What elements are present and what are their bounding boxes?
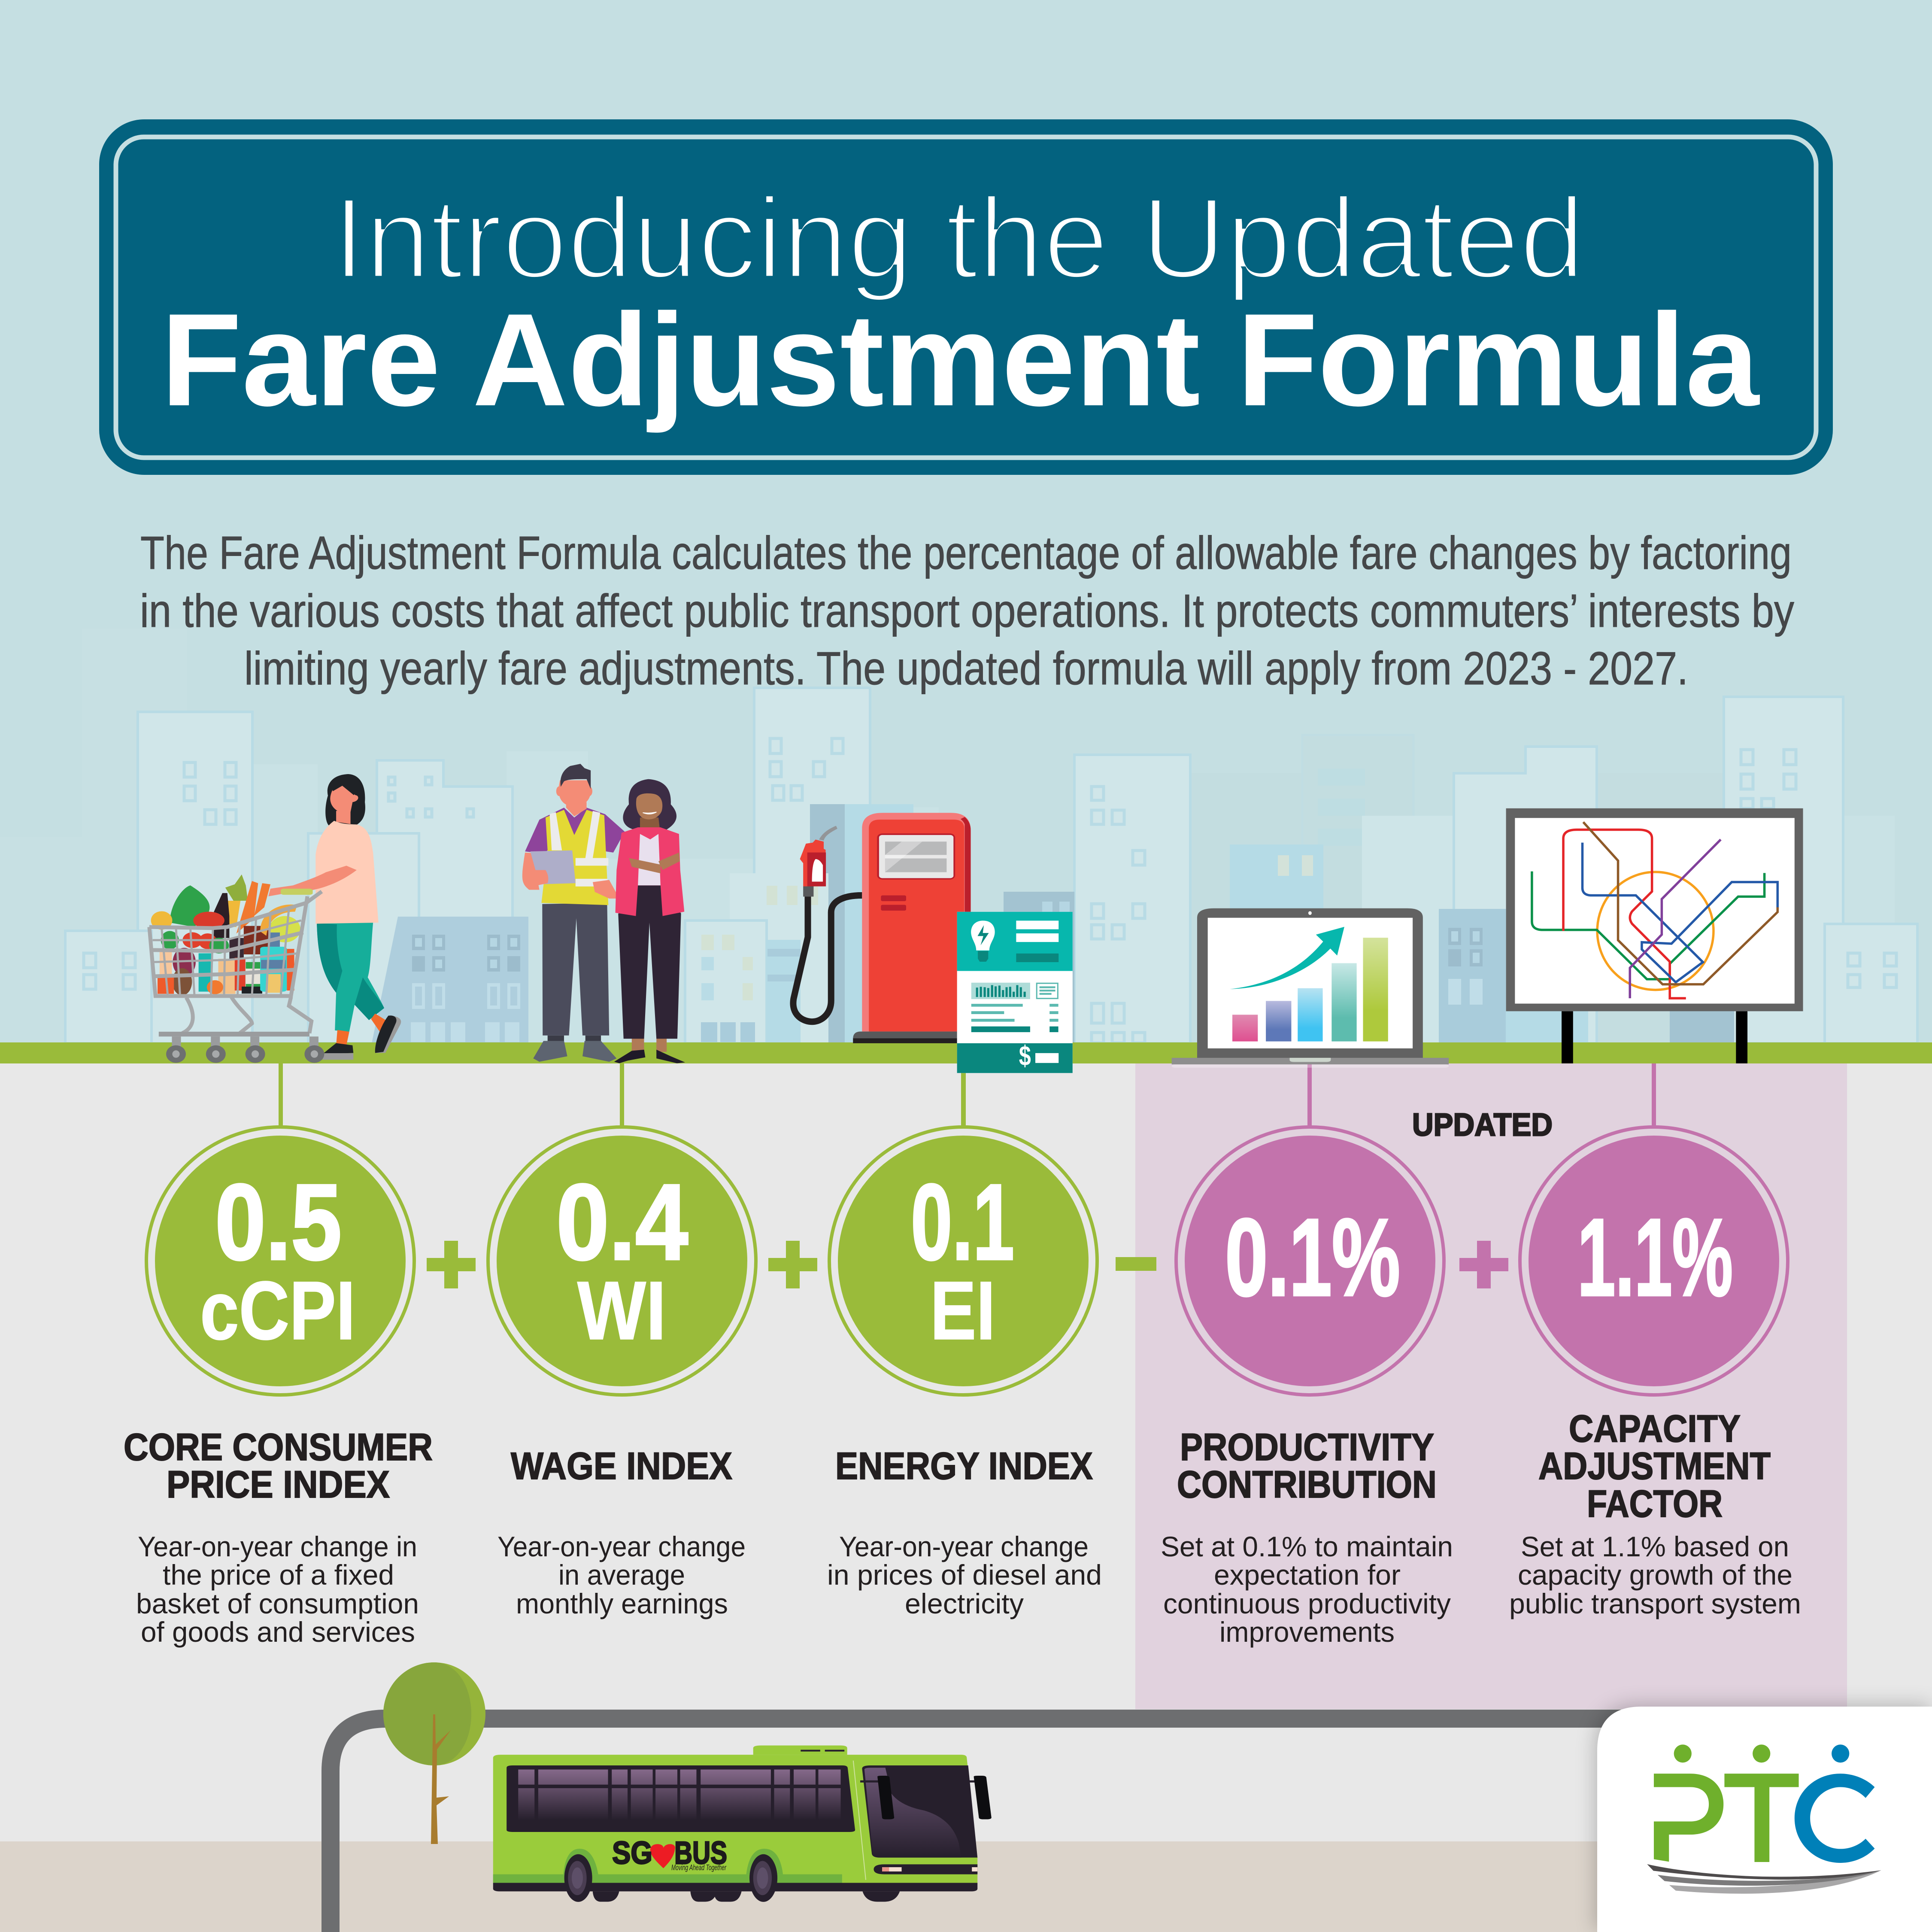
text block: wage index: in average bbox=[558, 1559, 685, 1591]
illustration: fuel pump bbox=[793, 813, 971, 1043]
SG Bus logo text: Moving Ahead Together bbox=[671, 1863, 727, 1872]
text block: core consumer price index: basket of consumption bbox=[136, 1588, 419, 1619]
PTC logo bbox=[1647, 1744, 1881, 1894]
bus wheels bbox=[563, 1849, 783, 1902]
text block: productivity contribution: expectation for bbox=[1214, 1559, 1401, 1591]
SG Bus logo text: SG bbox=[612, 1835, 652, 1871]
background city skyline bbox=[0, 629, 1917, 1045]
icon: tree bbox=[383, 1662, 485, 1844]
bus body bbox=[753, 1746, 847, 1755]
SG Bus logo text bbox=[612, 1835, 727, 1872]
illustration: green bus bbox=[493, 1746, 992, 1902]
text block: core consumer price index: of goods and services bbox=[141, 1616, 415, 1648]
woman shopper bbox=[268, 774, 401, 1060]
text block: productivity contribution: continuous productivity bbox=[1163, 1588, 1451, 1619]
arrow: rising trend bbox=[1230, 927, 1344, 989]
text block: energy index: ENERGY INDEX bbox=[835, 1444, 1093, 1487]
text block: productivity contribution: CONTRIBUTION bbox=[1177, 1463, 1437, 1506]
connector lines bbox=[279, 1063, 1656, 1126]
text block: capacity adjustment factor bbox=[1509, 1407, 1801, 1619]
text block: core consumer price index: Year-on-year change in bbox=[138, 1531, 417, 1562]
icon: heart bbox=[650, 1844, 675, 1868]
text block: capacity adjustment factor: CAPACITY bbox=[1569, 1407, 1741, 1450]
text block: energy index bbox=[827, 1444, 1102, 1619]
formula circle: WI: 0.4 bbox=[556, 1162, 688, 1282]
text block: energy index: in prices of diesel and bbox=[827, 1559, 1102, 1591]
illustration: rail network map board bbox=[1506, 808, 1803, 1063]
text block: productivity contribution: improvements bbox=[1219, 1616, 1395, 1648]
formula circle: WI bbox=[488, 1127, 756, 1395]
worker in high-visibility vest bbox=[522, 764, 625, 1062]
pump body bbox=[853, 813, 971, 1043]
bus side windows bbox=[507, 1765, 855, 1832]
text block: productivity contribution: Set at 0.1% to maintain bbox=[1161, 1531, 1453, 1562]
shopping cart frame bbox=[149, 892, 322, 1033]
bus headlights bbox=[873, 1864, 977, 1874]
text block: core consumer price index: CORE CONSUMER bbox=[124, 1425, 433, 1468]
hose bbox=[793, 896, 862, 1022]
text block: wage index: Year-on-year change bbox=[497, 1531, 746, 1562]
groceries bbox=[151, 875, 300, 995]
text block: wage index: monthly earnings bbox=[516, 1588, 728, 1619]
sky background bbox=[0, 0, 1932, 1043]
title banner bbox=[99, 119, 1833, 475]
text block: productivity contribution bbox=[1161, 1425, 1453, 1648]
text block: energy index: electricity bbox=[905, 1588, 1024, 1619]
panel: updated components (pink) bbox=[1135, 1063, 1847, 1709]
formula circle: cCPI: cCPI bbox=[200, 1264, 355, 1357]
bill mini chart bbox=[971, 983, 1058, 999]
ground: grey lower panel bbox=[0, 1063, 1932, 1849]
PTC logo panel bbox=[1597, 1707, 1932, 1932]
woman in pink blazer bbox=[614, 779, 685, 1063]
text block: capacity adjustment factor: capacity growth of the bbox=[1518, 1559, 1792, 1591]
text block: wage index bbox=[497, 1444, 746, 1619]
illustration: laptop with growth chart bbox=[1172, 908, 1449, 1068]
bus windscreen bbox=[860, 1765, 992, 1858]
formula circle: cCPI bbox=[146, 1127, 414, 1395]
operator: plus bbox=[1459, 1241, 1508, 1288]
formula circle: EI bbox=[829, 1127, 1097, 1395]
formula circle: WI: WI bbox=[577, 1264, 666, 1357]
text block: wage index: WAGE INDEX bbox=[511, 1444, 732, 1487]
dollar amount bbox=[1019, 1040, 1059, 1072]
title line 2: Fare Adjustment Formula bbox=[161, 286, 1760, 434]
text block: energy index: Year-on-year change bbox=[839, 1531, 1089, 1562]
bar chart bbox=[1232, 938, 1388, 1042]
formula circle: capacity 1.1%: 1.1% bbox=[1577, 1196, 1733, 1319]
SG Bus logo text: BUS bbox=[674, 1835, 727, 1871]
cart wheels bbox=[159, 1032, 324, 1063]
icon: light bulb bbox=[971, 920, 995, 962]
nozzle bbox=[800, 826, 837, 896]
text block: productivity contribution: PRODUCTIVITY bbox=[1180, 1425, 1434, 1468]
title line 1: Introducing the Updated bbox=[333, 173, 1585, 303]
road bbox=[331, 1719, 1653, 1932]
formula circle: capacity 1.1% bbox=[1520, 1127, 1788, 1395]
formula circle: cCPI: 0.5 bbox=[215, 1162, 342, 1282]
operator: plus bbox=[427, 1241, 476, 1288]
text block: capacity adjustment factor: ADJUSTMENT bbox=[1538, 1444, 1771, 1487]
label: updated: UPDATED bbox=[1412, 1107, 1553, 1142]
ground: beige pavement bbox=[0, 1841, 1932, 1932]
text block: capacity adjustment factor: Set at 1.1% based on bbox=[1521, 1531, 1789, 1562]
text block: core consumer price index bbox=[124, 1425, 433, 1648]
formula circle: productivity 0.1%: 0.1% bbox=[1225, 1196, 1400, 1319]
text block: core consumer price index: the price of a fixed bbox=[163, 1559, 394, 1591]
illustration: woman with shopping cart bbox=[149, 774, 401, 1063]
illustration: worker and woman bbox=[522, 764, 685, 1063]
bus undercarriage bbox=[593, 1891, 900, 1902]
text block: capacity adjustment factor: FACTOR bbox=[1587, 1482, 1723, 1525]
operator: plus bbox=[768, 1241, 817, 1288]
illustration: utility bill bbox=[957, 912, 1073, 1073]
rail lines bbox=[1532, 822, 1777, 998]
ground: green strip bbox=[0, 1042, 1932, 1063]
text block: capacity adjustment factor: public transport system bbox=[1509, 1588, 1801, 1619]
text block: core consumer price index: PRICE INDEX bbox=[167, 1463, 390, 1506]
formula circle: EI: 0.1 bbox=[911, 1162, 1014, 1282]
formula circle: EI: EI bbox=[930, 1264, 995, 1357]
operator: minus bbox=[1116, 1257, 1156, 1271]
intro paragraph: limiting yearly fare adjustments. The updated formula will apply from 2023 - 2027. bbox=[244, 642, 1688, 695]
intro paragraph bbox=[140, 527, 1794, 695]
dollar amount: $ bbox=[1019, 1040, 1031, 1072]
formula circle: productivity 0.1% bbox=[1176, 1127, 1444, 1395]
